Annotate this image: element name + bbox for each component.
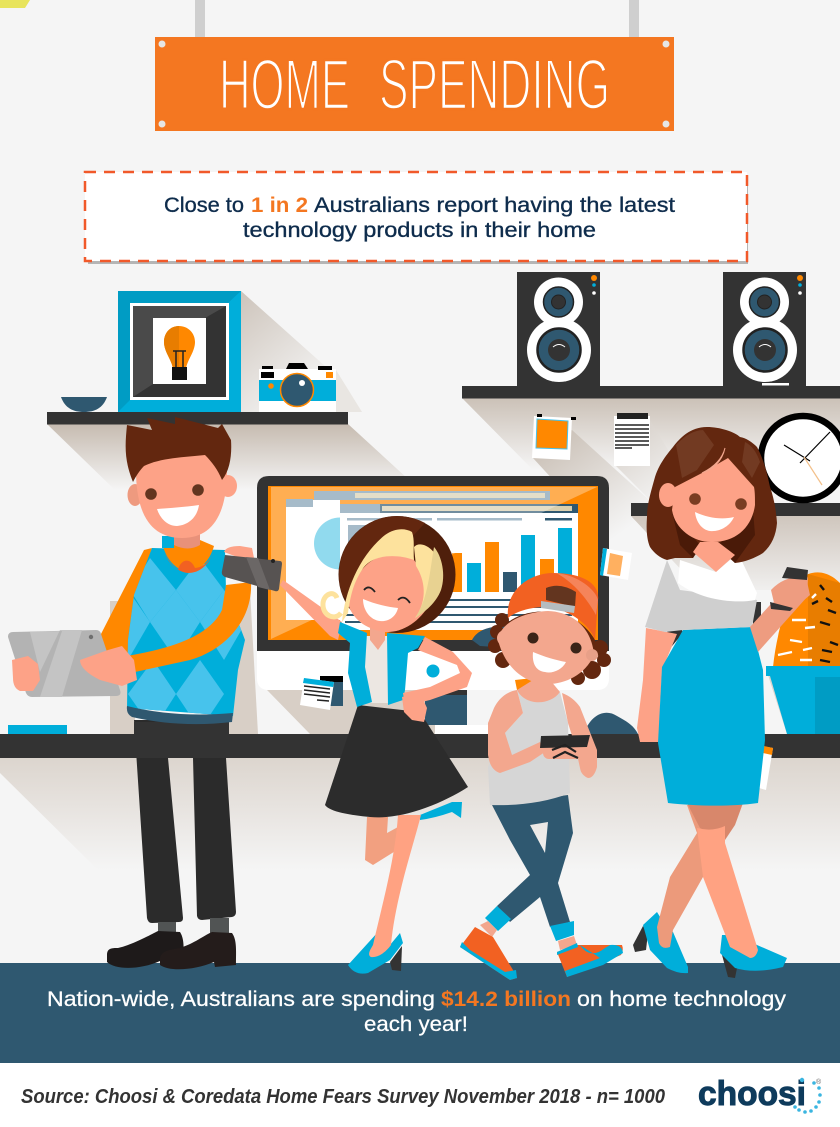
woman eyes (689, 493, 701, 505)
title text: SPENDING (379, 46, 610, 125)
band text: $14.2 billion (441, 988, 571, 1011)
girl jacket (338, 622, 425, 707)
shelf: top right (462, 386, 840, 398)
man legs (134, 720, 236, 936)
woman hair strand (702, 448, 725, 473)
callout text: Close to (164, 194, 244, 217)
icon: framed light bulb (118, 291, 241, 412)
shelf: top left (47, 412, 348, 424)
icon: blue book (8, 725, 67, 734)
man smile (157, 505, 199, 526)
boy face (498, 611, 594, 684)
screen bar chart (345, 528, 572, 622)
logo: choosi: choosi (698, 1075, 806, 1113)
woman face (672, 458, 755, 542)
girl legs (365, 815, 421, 957)
person: boy (460, 573, 623, 980)
icon: card note (300, 676, 343, 710)
background speaker strip (667, 602, 761, 652)
person: girl (280, 516, 472, 974)
tablet (8, 630, 120, 697)
girl eyes (364, 587, 410, 603)
boy smile (533, 652, 566, 673)
man shoes (107, 931, 236, 969)
woman back leg (657, 805, 725, 948)
orange tag (515, 678, 535, 690)
boy cuffs (480, 906, 577, 950)
boy hair curls (488, 611, 611, 685)
monitor (257, 476, 609, 690)
man eyes (145, 488, 157, 500)
callout text: 1 in 2 (251, 194, 308, 217)
girl curl (323, 594, 341, 617)
title text: HOME (219, 46, 350, 125)
icon: camera (259, 363, 336, 412)
icon: bowl (61, 397, 107, 412)
band text: Nation-wide, Australians are spending (47, 988, 435, 1011)
footer background (0, 1063, 840, 1127)
man vest (127, 548, 245, 716)
girl shoe (348, 932, 403, 974)
girl blonde hair (342, 529, 414, 622)
man head (126, 417, 237, 538)
icon: small chart note (600, 548, 632, 580)
woman shoes (633, 912, 787, 978)
screen windows (286, 491, 578, 630)
man right arm (127, 582, 251, 672)
person: man (8, 417, 282, 969)
woman hair back (647, 427, 777, 563)
girl extended arm (280, 580, 342, 640)
boy shoes (460, 927, 623, 980)
girl hair back (338, 516, 456, 633)
boy top (488, 690, 570, 805)
callout text: Australians report having the latest (314, 194, 675, 217)
callout text: technology products in their home (243, 219, 596, 242)
man hair (126, 417, 231, 482)
bottom band (0, 963, 840, 1063)
icon: book tag (759, 746, 773, 790)
boy cap (508, 573, 598, 640)
man collar and neck (162, 532, 214, 573)
callout box (85, 172, 748, 264)
woman skirt (658, 627, 765, 806)
icon: speaker left (517, 272, 600, 386)
man hands (12, 546, 254, 691)
boy phone (540, 735, 590, 758)
woman left arm (637, 628, 677, 742)
monitor stand (425, 690, 488, 734)
monitor chin (257, 651, 609, 690)
corner tab (0, 0, 30, 8)
boy neck (517, 680, 560, 704)
icon: orange sticky note (532, 414, 576, 460)
plant (766, 572, 840, 734)
icon: clock (761, 416, 840, 500)
girl raised shoe (420, 802, 462, 820)
girl face (348, 555, 430, 632)
woman front leg (697, 826, 758, 958)
girl arm on hip (403, 637, 472, 706)
band text: on home technology (577, 988, 787, 1011)
title sign (155, 37, 674, 131)
girl smile (363, 599, 398, 621)
source text: Source: Choosi & Coredata Home Fears Survey November 2018 - n= 1000 (21, 1086, 665, 1108)
woman top (645, 553, 757, 632)
man hem (127, 706, 233, 724)
man phone (222, 555, 282, 591)
wall shadows (0, 291, 840, 870)
girl top (365, 636, 388, 703)
girl hand (402, 693, 427, 722)
icon: speaker right (723, 272, 806, 386)
person: woman (633, 427, 810, 978)
boy arms (488, 690, 597, 778)
boy eyes (528, 632, 538, 644)
woman neck (693, 542, 735, 572)
woman right arm (750, 567, 810, 652)
girl skirt (325, 705, 468, 817)
woman knee shade (687, 803, 743, 840)
boy jeans (492, 795, 573, 927)
band text: each year! (364, 1013, 468, 1036)
desk (0, 734, 840, 758)
woman smile (695, 512, 734, 531)
icon: notepad (614, 413, 650, 466)
woman hair shading (672, 430, 760, 563)
woman phone (782, 567, 808, 580)
man left sleeve (101, 548, 152, 665)
girl neck (370, 628, 385, 650)
logo: choosi: ® (816, 1078, 822, 1086)
icon: mouse (584, 713, 638, 734)
hanging sign posts (195, 0, 639, 38)
shelf: middle right (631, 503, 840, 516)
